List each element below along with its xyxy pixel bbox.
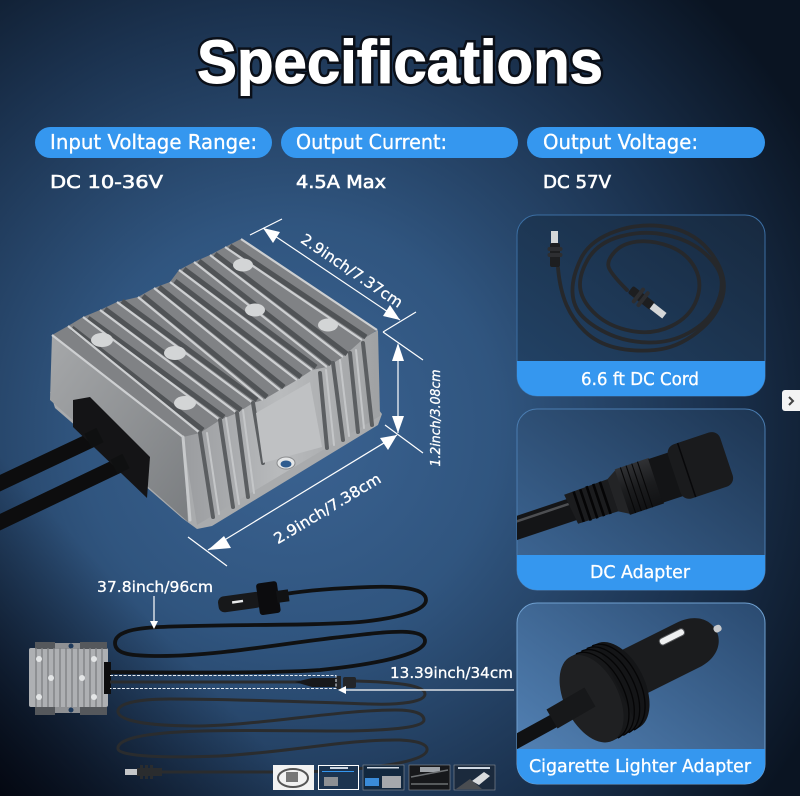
device cable collars: [88, 435, 126, 467]
device side plate: [50, 335, 188, 522]
title: Specifications: [197, 28, 603, 96]
caption: 6.6 ft DC Cord: [581, 370, 699, 390]
device fin ridges: [52, 239, 377, 437]
icon: cigarette lighter plug: [517, 618, 722, 749]
spec: input voltage range: [35, 127, 272, 193]
spec: input voltage range: Input Voltage Range:: [50, 130, 257, 154]
device fin shadows: [72, 246, 366, 430]
card: cigarette lighter adapter: [510, 591, 765, 784]
dimension: height 3.08cm: [383, 332, 444, 466]
caption band: [517, 749, 765, 784]
spec: output current: 4.5A Max: [296, 172, 386, 193]
caption band: [517, 361, 765, 396]
dimension: width 7.38cm: 2.9inch/7.38cm: [271, 470, 384, 548]
device connector block: [73, 397, 150, 498]
device fin channels: [52, 239, 377, 437]
device front face: [183, 330, 380, 525]
next arrow button: [782, 390, 800, 411]
dimension: depth 7.37cm: [250, 219, 416, 332]
spec: output voltage: DC 57V: [543, 172, 612, 193]
spec: output current: [281, 127, 518, 193]
device mounting hole: [277, 457, 295, 469]
spec: output voltage: Output Voltage:: [543, 130, 698, 154]
device screws: [91, 258, 338, 410]
thumbnail 3: [363, 765, 404, 790]
small converter top view: [29, 642, 111, 715]
device base flange: [50, 392, 382, 529]
spec: output current: Output Current:: [296, 130, 447, 154]
dimension: depth 7.37cm: 2.9inch/7.37cm: [297, 230, 406, 312]
label: 13.39inch/34cm: 13.39inch/34cm: [390, 664, 513, 682]
device recess: [256, 382, 322, 463]
cable to cigarette plug: [110, 587, 426, 673]
cable length diagram: [29, 578, 514, 779]
thumbnail 4: [409, 765, 450, 790]
thumbnail 1: [273, 765, 314, 790]
arrow: 37.8inch: [150, 596, 158, 629]
dashed extent box: [110, 676, 336, 688]
icon: coiled cord: [558, 225, 724, 351]
thumbnail strip: [273, 765, 495, 790]
cable to DC plug: [110, 681, 427, 772]
device fin front ends: [183, 343, 372, 520]
thumbnail 5: [454, 765, 495, 790]
title: Specifications: [197, 28, 603, 96]
device cables: [0, 436, 126, 526]
DC barrel plug: [125, 765, 162, 779]
dimension: height 3.08cm: 1.2inch/3.08cm: [429, 370, 444, 466]
spec: output voltage: [527, 127, 765, 193]
arrow: 13.39inch: [338, 686, 514, 694]
cigarette plug: [216, 579, 291, 621]
spec: input voltage range: DC 10-36V: [50, 172, 164, 193]
icon: DC adapter connector: [517, 432, 734, 540]
card: DC adapter: [487, 409, 765, 590]
caption band: [517, 555, 765, 590]
label: 37.8inch/96cm: 37.8inch/96cm: [97, 578, 213, 596]
caption: Cigarette Lighter Adapter: [529, 757, 752, 777]
card: DC cord: [517, 215, 765, 396]
device: finned converter: [0, 239, 382, 529]
dimension: width 7.38cm: [188, 435, 397, 566]
icon: cord plug end: [625, 282, 670, 323]
thumbnail 2: [318, 766, 358, 790]
middle DC connector: [295, 676, 356, 689]
icon: cord plug top: [548, 231, 562, 267]
caption: DC Adapter: [590, 563, 691, 583]
